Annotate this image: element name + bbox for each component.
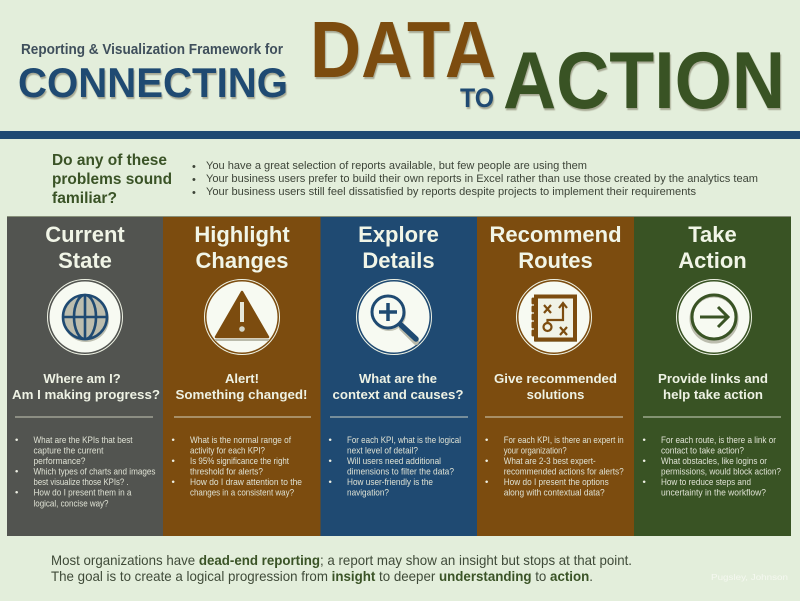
problems list: • bbox=[192, 161, 196, 173]
guiding questions: next level of detail? bbox=[347, 446, 418, 456]
guiding questions bbox=[172, 435, 302, 498]
guiding questions: • bbox=[328, 435, 332, 446]
guiding questions bbox=[15, 435, 156, 510]
heading: Explore bbox=[358, 222, 439, 247]
guiding questions: What obstacles, like logins or bbox=[661, 456, 767, 467]
problems list: • bbox=[192, 174, 196, 186]
question: solutions bbox=[527, 387, 584, 402]
conclusion text: The goal is to create a logical progression from insight to deeper understanding to action. bbox=[51, 568, 593, 584]
guiding questions: performance? bbox=[34, 456, 86, 467]
panel: explore details bbox=[320, 216, 477, 536]
question bbox=[332, 371, 464, 402]
icon: route map bbox=[516, 280, 592, 354]
question: Give recommended bbox=[494, 371, 617, 386]
question: Alert! bbox=[225, 371, 259, 386]
guiding questions: capture the current bbox=[34, 446, 104, 456]
conclusion text bbox=[51, 552, 632, 584]
guiding questions: changes in a consistent way? bbox=[190, 488, 294, 498]
guiding questions: How do I draw attention to the bbox=[190, 477, 302, 488]
question: context and causes? bbox=[332, 387, 464, 402]
guiding questions: • bbox=[328, 477, 332, 488]
guiding questions: permissions, would block action? bbox=[661, 466, 781, 478]
icon: arrow in circle bbox=[676, 280, 752, 354]
guiding questions: • bbox=[328, 456, 332, 467]
guiding questions: • bbox=[485, 456, 488, 467]
panel: current state bbox=[7, 216, 163, 536]
guiding questions: contact to take action? bbox=[661, 446, 744, 456]
guiding questions: • bbox=[642, 456, 646, 467]
guiding questions: along with contextual data? bbox=[504, 488, 605, 498]
question: Something changed! bbox=[176, 387, 308, 402]
heading: Current bbox=[45, 222, 125, 247]
conclusion text: Most organizations have dead-end reporting; a report may show an insight but stops at that point. bbox=[51, 552, 632, 568]
panel: take action bbox=[634, 216, 791, 536]
header title bbox=[18, 5, 785, 126]
guiding questions: • bbox=[15, 435, 18, 446]
subtitle: reporting framework: Reporting & Visualization Framework for bbox=[21, 41, 283, 58]
guiding questions: recommended actions for alerts? bbox=[504, 466, 624, 478]
heading: Highlight bbox=[194, 222, 290, 247]
problems question: Do any of these bbox=[52, 152, 167, 169]
guiding questions: navigation? bbox=[347, 488, 389, 498]
icon: magnifying glass bbox=[356, 280, 432, 354]
guiding questions: Is 95% significance the right bbox=[190, 456, 289, 467]
panel: recommend routes bbox=[477, 216, 634, 536]
guiding questions: • bbox=[485, 477, 488, 488]
problems list: Your business users still feel dissatisfied by reports despite projects to implement their requirements bbox=[206, 186, 697, 198]
guiding questions: How do I present the options bbox=[504, 477, 609, 488]
icon: warning triangle bbox=[204, 280, 280, 354]
question bbox=[494, 371, 617, 402]
problems list: You have a great selection of reports available, but few people are using them bbox=[206, 160, 587, 172]
title word: to: TO bbox=[460, 83, 494, 113]
guiding questions: • bbox=[642, 435, 646, 446]
heading bbox=[489, 222, 622, 273]
guiding questions bbox=[485, 435, 624, 498]
guiding questions: Will users need additional bbox=[347, 456, 441, 467]
title word: data: DATA bbox=[310, 5, 496, 94]
heading: Details bbox=[362, 248, 435, 273]
heading: Take bbox=[688, 222, 737, 247]
icon: globe bbox=[48, 280, 122, 354]
guiding questions: • bbox=[15, 466, 18, 478]
guiding questions: How do I present them in a bbox=[34, 488, 132, 498]
question: Provide links and bbox=[658, 371, 768, 386]
guiding questions: For each KPI, what is the logical bbox=[347, 435, 461, 446]
question: Where am I? bbox=[43, 371, 121, 386]
guiding questions: your organization? bbox=[504, 446, 567, 456]
guiding questions: How to reduce steps and bbox=[661, 477, 751, 488]
heading bbox=[358, 222, 439, 273]
guiding questions: For each KPI, is there an expert in bbox=[504, 435, 624, 446]
guiding questions bbox=[328, 435, 461, 498]
guiding questions: For each route, is there a link or bbox=[661, 435, 776, 446]
guiding questions: How user-friendly is the bbox=[347, 477, 433, 488]
header divider bar bbox=[0, 131, 800, 139]
problems question: problems sound bbox=[52, 171, 172, 188]
heading: Routes bbox=[518, 248, 593, 273]
question: What are the bbox=[359, 371, 437, 386]
guiding questions: dimensions to filter the data? bbox=[347, 466, 454, 478]
panel: highlight changes bbox=[163, 216, 320, 536]
heading bbox=[45, 222, 125, 273]
question bbox=[658, 371, 768, 402]
heading: Changes bbox=[196, 248, 288, 273]
problems question: familiar? bbox=[52, 190, 117, 207]
guiding questions: • bbox=[642, 477, 646, 488]
guiding questions: • bbox=[15, 488, 18, 498]
guiding questions bbox=[642, 435, 781, 498]
guiding questions: • bbox=[172, 435, 175, 446]
heading: Recommend bbox=[489, 222, 622, 247]
guiding questions: • bbox=[485, 435, 488, 446]
question bbox=[176, 371, 308, 402]
problems list: • bbox=[192, 187, 196, 199]
guiding questions: uncertainty in the workflow? bbox=[661, 488, 766, 498]
problems question bbox=[52, 152, 172, 207]
guiding questions: threshold for alerts? bbox=[190, 466, 263, 478]
question: Am I making progress? bbox=[12, 387, 160, 402]
guiding questions: What are the KPIs that best bbox=[34, 435, 133, 446]
guiding questions: logical, concise way? bbox=[34, 498, 108, 510]
heading: Action bbox=[678, 248, 747, 273]
heading bbox=[194, 222, 290, 273]
question: help take action bbox=[663, 387, 763, 402]
heading bbox=[678, 222, 747, 273]
title word: connecting: CONNECTING bbox=[18, 59, 288, 106]
heading: State bbox=[58, 248, 112, 273]
guiding questions: What is the normal range of bbox=[190, 435, 291, 446]
guiding questions: best visualize those KPIs? . bbox=[34, 477, 128, 488]
guiding questions: Which types of charts and images bbox=[34, 466, 156, 478]
question bbox=[12, 371, 160, 402]
guiding questions: • bbox=[172, 456, 175, 467]
guiding questions: What are 2-3 best expert- bbox=[504, 456, 596, 467]
guiding questions: • bbox=[172, 477, 175, 488]
problems list: Your business users prefer to build their own reports in Excel rather than use those created by the analytics team bbox=[206, 173, 758, 185]
guiding questions: activity for each KPI? bbox=[190, 446, 265, 456]
watermark: Pugsley, Johnson bbox=[711, 573, 788, 582]
problems list bbox=[192, 160, 758, 199]
